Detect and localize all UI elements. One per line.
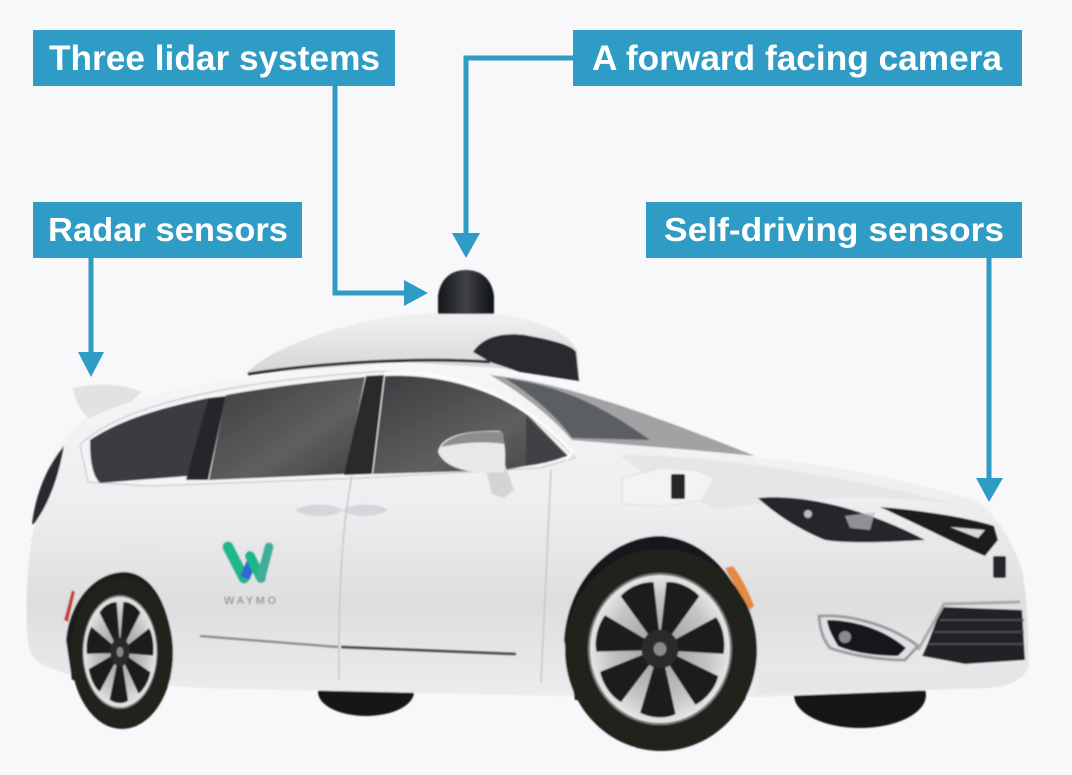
rear quarter window xyxy=(90,398,208,483)
callout: self-driving sensors xyxy=(646,202,1022,502)
arrow: to front sensors xyxy=(976,258,1003,502)
arrow: to lidar dome xyxy=(335,86,428,306)
front wheel xyxy=(565,549,757,751)
middle window xyxy=(209,377,365,480)
rear wheel xyxy=(71,577,173,729)
car body shell xyxy=(27,364,1029,697)
orange side marker xyxy=(725,566,754,610)
front door window xyxy=(373,376,568,474)
rocker trim xyxy=(200,636,516,654)
callout: three lidar systems xyxy=(33,30,428,306)
callout: radar sensors xyxy=(33,202,302,377)
side marker rear xyxy=(64,590,75,622)
window trim xyxy=(80,371,575,486)
hood shading xyxy=(620,455,960,510)
rear wheel arch xyxy=(66,572,173,680)
door seams xyxy=(30,470,551,682)
front sensor xyxy=(993,556,1006,578)
label: self-driving sensors: Self-driving sensors xyxy=(664,211,1004,248)
label: three lidar systems xyxy=(33,30,395,86)
label: three lidar systems: Three lidar systems xyxy=(49,39,380,78)
side mirror xyxy=(438,431,514,498)
label: forward facing camera: A forward facing camera xyxy=(592,39,1003,78)
front sensor box xyxy=(622,468,715,506)
car: Waymo self-driving minivan xyxy=(27,270,1029,751)
upper grille xyxy=(880,507,998,556)
lower grille xyxy=(918,602,1025,664)
door pillar xyxy=(344,375,384,475)
arrow: to rear radar xyxy=(78,258,104,377)
label: radar sensors: Radar sensors xyxy=(48,211,288,248)
pillar xyxy=(186,396,226,480)
windshield xyxy=(490,375,755,456)
rear spoiler xyxy=(73,385,142,420)
lidar dome xyxy=(438,270,494,314)
logo wordmark: WAYMO xyxy=(224,595,276,607)
label: radar sensors xyxy=(33,202,302,258)
far side wheels xyxy=(318,662,926,728)
front splitter xyxy=(758,664,1029,694)
label: forward facing camera xyxy=(573,30,1022,86)
fog lamp xyxy=(819,616,918,660)
door handles xyxy=(295,505,388,516)
label: self-driving sensors xyxy=(646,202,1022,258)
front wheel arch xyxy=(564,536,752,700)
callout: forward facing camera xyxy=(452,30,1022,258)
headlight xyxy=(758,497,925,542)
rear tail light xyxy=(32,446,64,524)
logo: Waymo xyxy=(224,547,276,607)
roof sensor pod xyxy=(246,313,579,381)
arrow: to camera xyxy=(452,58,573,258)
